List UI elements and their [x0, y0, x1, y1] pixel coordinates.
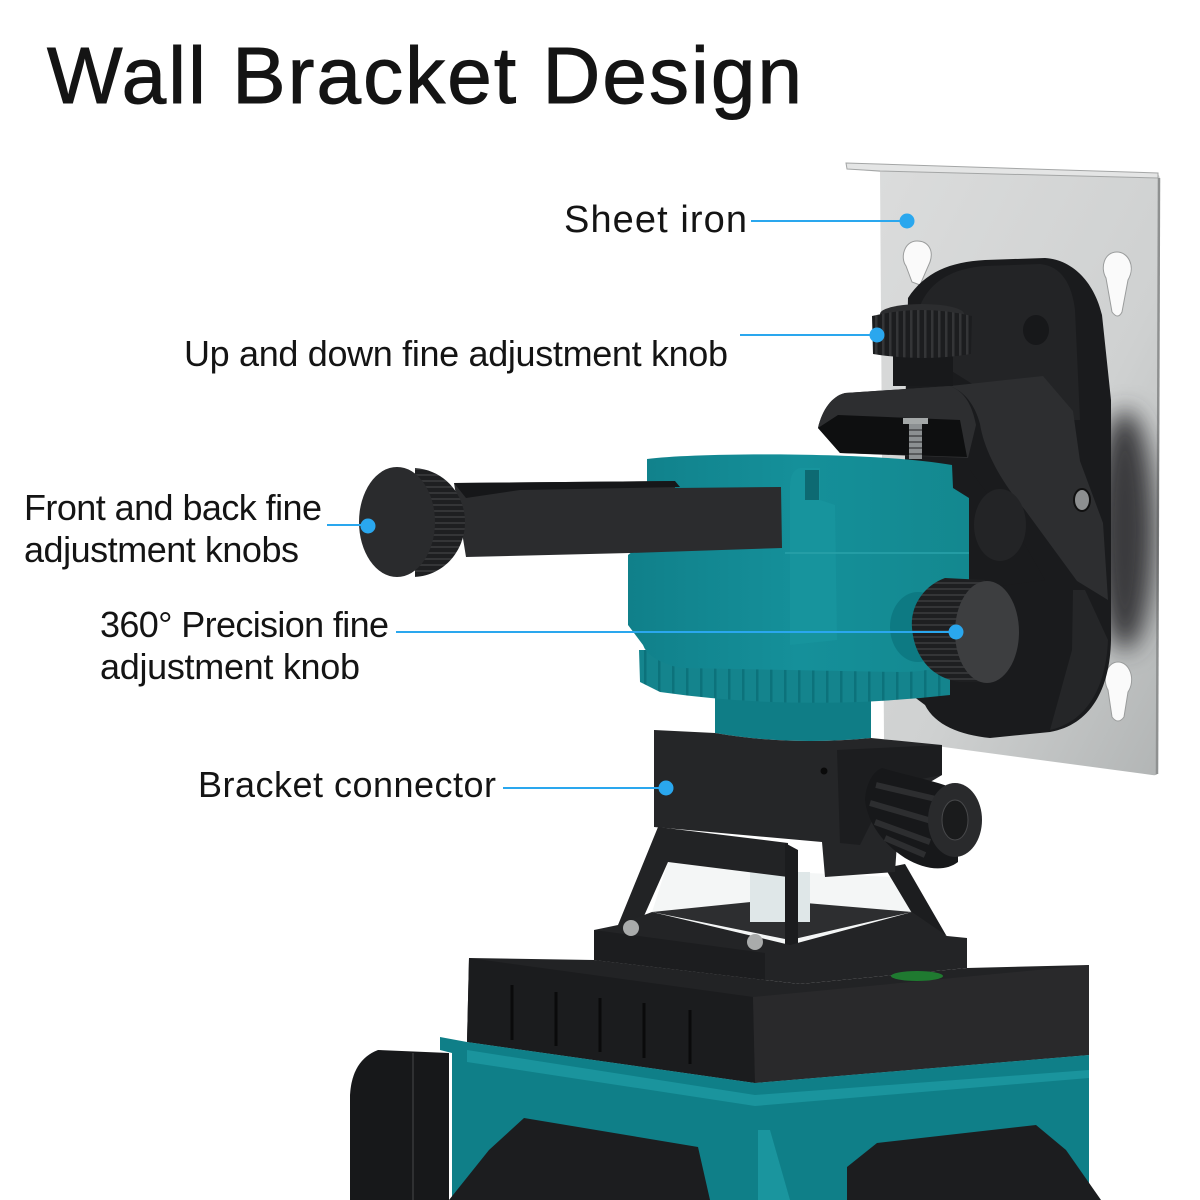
sheet iron plate [846, 163, 1160, 775]
body [628, 454, 969, 672]
callout: front and back knobs: Front and back fine [24, 487, 322, 528]
keyhole upper right [1103, 252, 1131, 316]
right window [847, 1125, 1101, 1200]
level body block [467, 958, 1089, 1083]
callout: 360 precision knob: 360° Precision fine [100, 604, 389, 645]
up and down knob [872, 304, 972, 386]
teal knob boss [890, 592, 946, 662]
threaded screw [903, 418, 928, 459]
keyhole left [903, 241, 931, 285]
connector knob [865, 768, 958, 868]
title: Wall Bracket Design [47, 31, 802, 120]
left window [449, 1118, 710, 1200]
left knob knurl [415, 468, 465, 577]
horizontal arm and knob [359, 467, 782, 577]
neck [715, 695, 871, 741]
callout: bracket connector [198, 764, 674, 805]
callout: bracket connector: Bracket connector [198, 764, 496, 805]
bubble level [891, 971, 943, 981]
keyhole lower right [1105, 662, 1132, 721]
left knob face [359, 467, 435, 577]
callout: sheet iron: Sheet iron [564, 199, 747, 241]
ring [639, 650, 950, 703]
teal head [628, 454, 969, 741]
bracket connector [654, 730, 982, 877]
adjustment arm [818, 376, 1108, 600]
callout: 360 precision knob: adjustment knob [100, 646, 360, 687]
black wall mount [905, 258, 1111, 738]
arm pin [1074, 489, 1090, 511]
screws [623, 920, 639, 936]
callout: 360 precision knob [100, 604, 964, 687]
side handle [350, 1050, 449, 1200]
teal base [350, 1037, 1101, 1200]
product: wall bracket and laser level [350, 163, 1160, 1200]
housing base [594, 912, 967, 984]
callout: up and down knob [184, 328, 884, 374]
prism housing [594, 827, 967, 984]
callout: front and back knobs [24, 487, 376, 570]
right knob [912, 578, 1019, 683]
callout: sheet iron [564, 199, 914, 241]
callout: front and back knobs: adjustment knobs [24, 529, 299, 570]
callout: up and down knob: Up and down fine adjustment knob [184, 333, 728, 374]
